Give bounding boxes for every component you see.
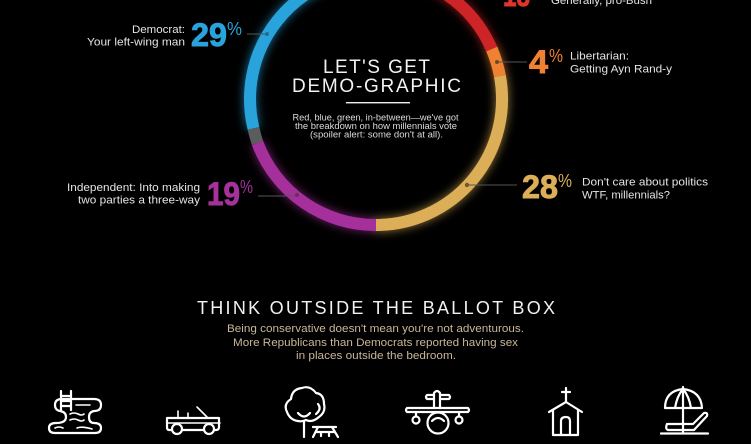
centre heading: DEMO-GRAPHIC [292, 76, 461, 97]
centre divider [346, 102, 410, 103]
section intro text [227, 323, 524, 362]
callout: Independent 19%: 19 [207, 176, 240, 212]
callout: Democrat 29%: Your left-wing man [87, 36, 185, 48]
section intro text: More Republicans than Democrats reported having sex [233, 337, 519, 349]
icon: church [549, 388, 582, 435]
centre heading [292, 57, 461, 97]
callout: Independent 19%: % [240, 177, 253, 197]
callout: Libertarian 4%: Libertarian: [570, 50, 629, 62]
callout: Democrat 29% [87, 17, 269, 53]
centre intro text: the breakdown on how millennials vote [295, 121, 457, 131]
callout: Libertarian 4% [495, 44, 672, 80]
callout: Independent 19% [67, 176, 299, 212]
callout: Democrat 29%: 29 [191, 17, 227, 53]
callout: Libertarian 4%: Getting Ayn Rand-y [570, 64, 672, 76]
icon: beach umbrella and lounger [661, 387, 708, 434]
centre intro text: Red, blue, green, in-between—we've got [292, 112, 459, 122]
callout: Independent 19%: two parties a three-way [78, 194, 200, 206]
callout: Don't care 28%: WTF, millennials? [582, 190, 670, 202]
centre intro text [292, 112, 459, 140]
callout: Libertarian 4%: % [549, 46, 563, 66]
callout: Republican (cropped figure) [503, 0, 652, 13]
donut chart: party affiliation [250, 0, 502, 225]
centre heading: LET'S GET [323, 57, 430, 78]
callout: Democrat 29%: % [227, 19, 242, 39]
icon: convertible car [167, 407, 220, 434]
section heading: THINK OUTSIDE THE BALLOT BOX [197, 298, 555, 318]
icon: airplane [406, 391, 469, 434]
callout: Don't care 28%: Don't care about politics [582, 176, 708, 188]
section intro text: in places outside the bedroom. [296, 350, 456, 362]
callout: Democrat 29%: Democrat: [132, 24, 185, 36]
icon: tree with picnic table [286, 387, 338, 437]
callout: Don't care 28%: % [558, 171, 572, 191]
section intro text: Being conservative doesn't mean you're not adventurous. [227, 323, 524, 335]
centre intro text: (spoiler alert: some don't at all). [310, 130, 443, 140]
callout: Don't care 28%: 28 [522, 169, 558, 205]
icon: swimming pool [49, 391, 101, 433]
callout: Don't care 28% [465, 169, 708, 205]
callout: Independent 19%: Independent: Into making [67, 182, 200, 194]
callout: Libertarian 4%: 4 [529, 44, 548, 80]
